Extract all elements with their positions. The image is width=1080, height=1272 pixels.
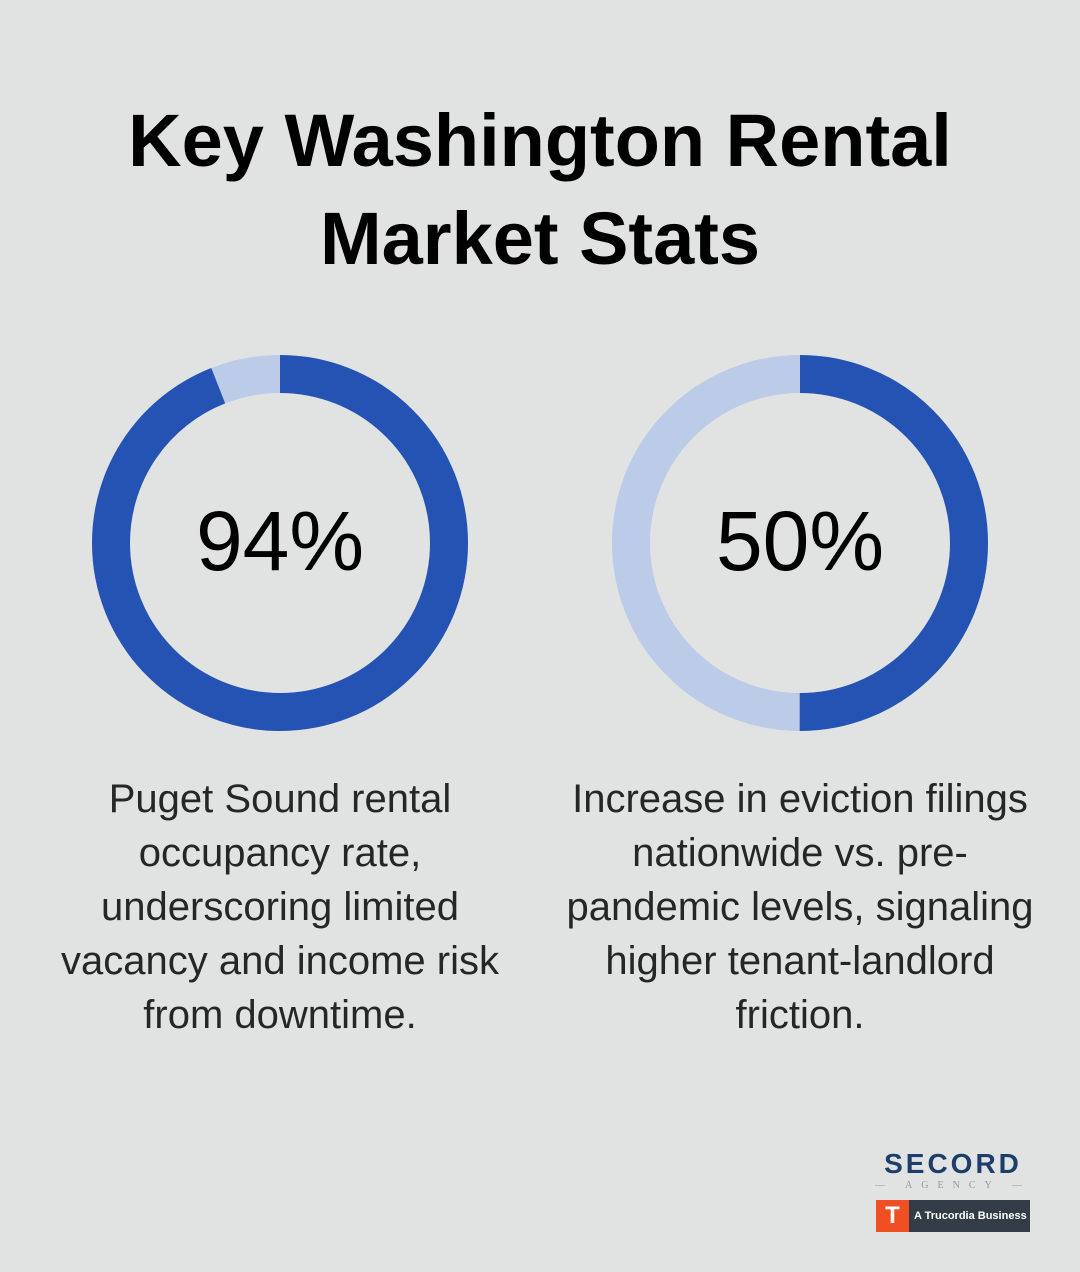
donut chart: 50%: 50%: [716, 494, 884, 588]
text: eviction description: Increase in eviction filings nationwide vs. pre-pandemic levels, signaling higher tenant-landlord friction.: [567, 777, 1033, 1037]
logo: — AGENCY —: [875, 1180, 1031, 1191]
logo: A Trucordia Business: [914, 1210, 1027, 1222]
logo: SECORD: [884, 1148, 1022, 1179]
title: Key Washington Rental: [128, 99, 952, 182]
title: [128, 99, 952, 280]
donut chart: 94%: [92, 355, 468, 731]
donut chart: 94%: 94%: [196, 494, 364, 588]
title: Market Stats: [320, 197, 760, 280]
logo: T: [885, 1202, 900, 1229]
donut chart: 50%: [612, 355, 988, 731]
text: occupancy description: Puget Sound rental occupancy rate, underscoring limited vacancy and income risk from downtime.: [61, 777, 499, 1037]
logo: [875, 1148, 1031, 1232]
